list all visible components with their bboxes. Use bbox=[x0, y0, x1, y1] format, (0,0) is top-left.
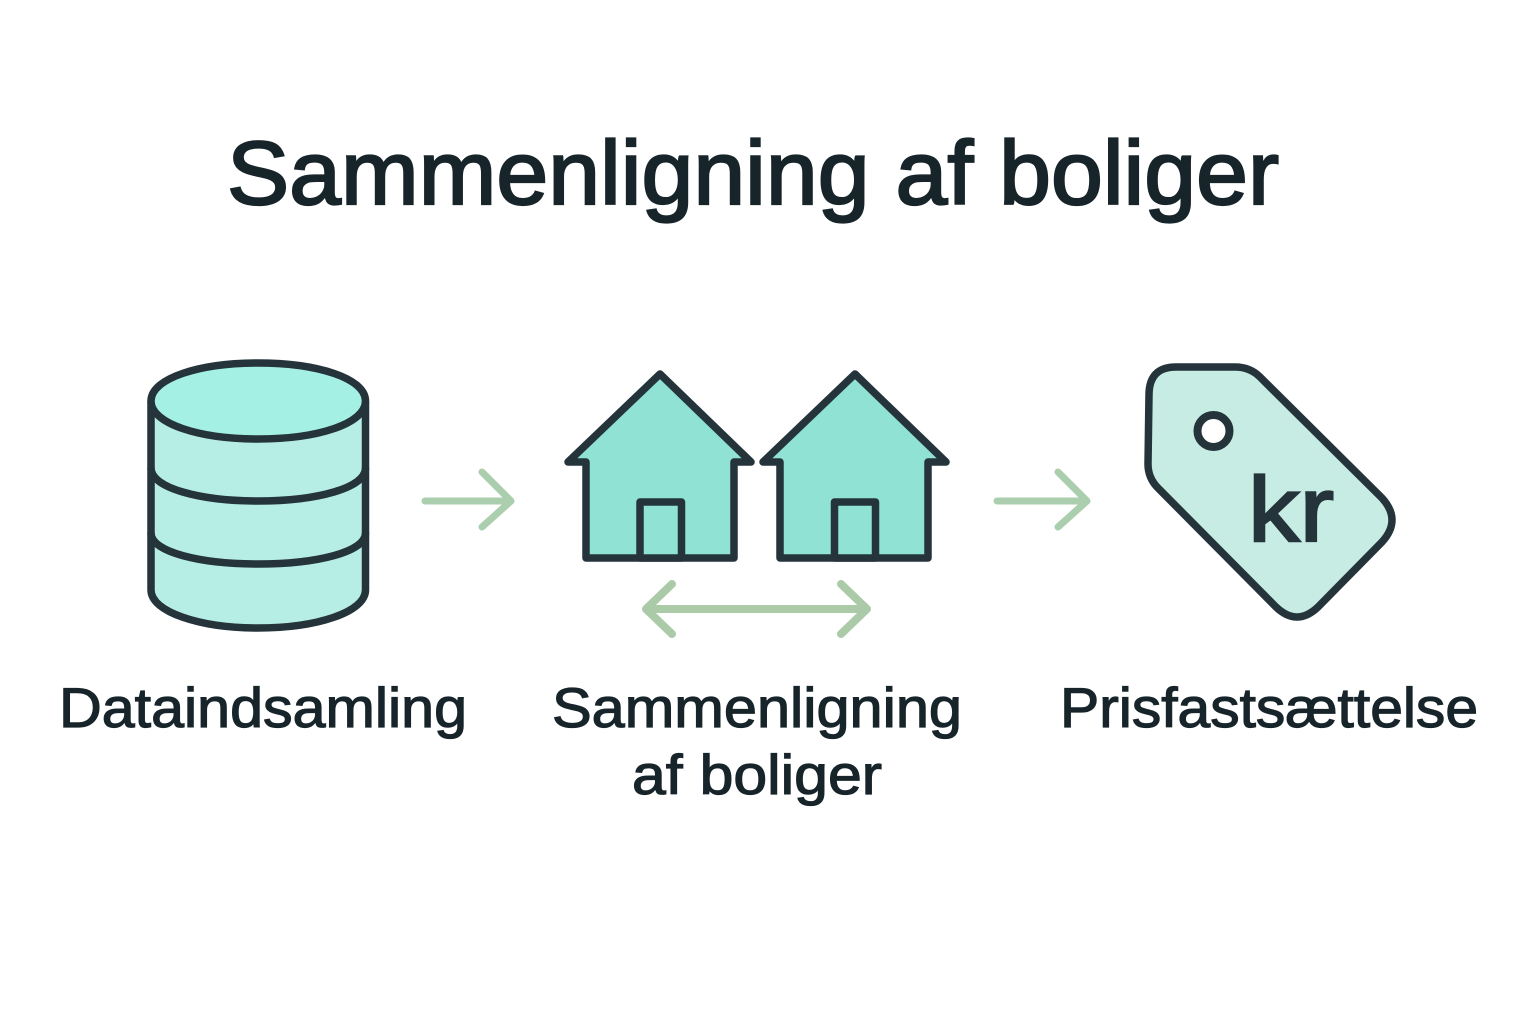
label: pricing: Prisfastsættelse bbox=[1060, 676, 1478, 739]
icon: price tag bbox=[1148, 367, 1392, 617]
icon: left house bbox=[568, 374, 751, 558]
arrow: two-way comparison bbox=[646, 584, 867, 634]
title: Sammenligning af boliger bbox=[227, 124, 1279, 224]
tag currency label: kr bbox=[1248, 459, 1334, 561]
arrow: comparison to price bbox=[997, 472, 1087, 527]
icon: right house bbox=[763, 374, 946, 558]
icon: database bbox=[151, 363, 366, 628]
label: housing comparison: Sammenligning bbox=[552, 676, 962, 739]
arrow: data to comparison bbox=[425, 472, 511, 527]
label: data collection: Dataindsamling bbox=[59, 676, 467, 739]
label: housing comparison bbox=[552, 676, 962, 806]
label: housing comparison: af boliger bbox=[632, 743, 882, 806]
